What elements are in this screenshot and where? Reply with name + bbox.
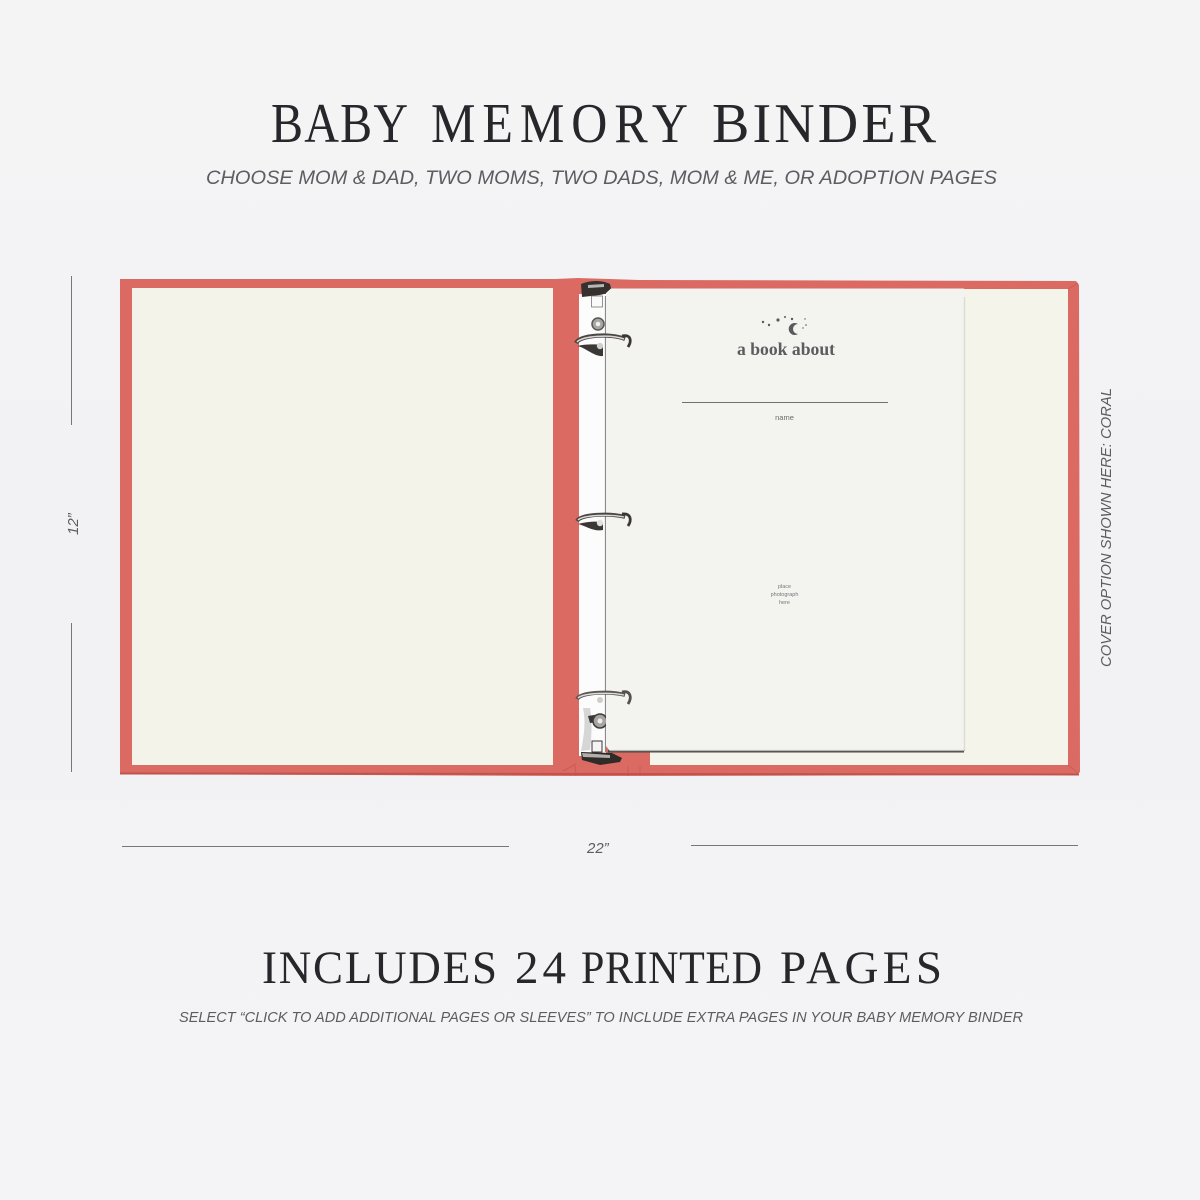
ring middle xyxy=(577,514,630,530)
open binder xyxy=(120,278,1080,776)
subtitle: CHOOSE MOM & DAD, TWO MOMS, TWO DADS, MOM & ME, OR ADOPTION PAGES xyxy=(206,167,997,189)
sheet: a book about xyxy=(682,316,888,606)
heading on sheet: a book about xyxy=(737,339,835,359)
footnote: SELECT “CLICK TO ADD ADDITIONAL PAGES OR SLEEVES” TO INCLUDE EXTRA PAGES IN YOUR BABY MEMORY BINDER xyxy=(179,1010,1024,1026)
left inside page xyxy=(132,288,553,765)
ring top xyxy=(576,336,630,356)
heading: includes 24 printed pages: 24 xyxy=(515,942,566,994)
coral cover xyxy=(120,278,1080,776)
name label: name xyxy=(775,413,794,422)
cover bottom edge xyxy=(120,774,1079,775)
ring bottom xyxy=(577,692,630,704)
cover colour note: COVER OPTION SHOWN HERE: CORAL xyxy=(1099,388,1115,667)
heading: includes 24 printed pages xyxy=(262,941,942,994)
height dimension: 12 inches: 12” xyxy=(65,512,82,535)
title: BABY xyxy=(271,94,408,155)
title xyxy=(271,93,937,155)
width dimension: 22 inches: 22” xyxy=(586,840,610,857)
stack of pages below front sheet xyxy=(608,750,964,752)
title: BINDER xyxy=(712,93,937,155)
name line xyxy=(682,402,888,404)
heading: includes 24 printed pages: PRINTED xyxy=(581,941,762,994)
right inside page xyxy=(650,289,1068,765)
cover fold notches xyxy=(563,283,1078,776)
photo placeholder text: here xyxy=(779,600,790,606)
icon: moon and stars xyxy=(762,316,807,335)
front sheet xyxy=(606,288,965,751)
metal ring mechanism plate xyxy=(579,281,622,765)
heading: includes 24 printed pages: INCLUDES xyxy=(262,941,497,993)
photo placeholder text: photograph xyxy=(771,592,798,598)
title: MEMORY xyxy=(431,93,688,155)
heading: includes 24 printed pages: PAGES xyxy=(780,942,942,994)
photo placeholder text: place xyxy=(778,584,791,590)
